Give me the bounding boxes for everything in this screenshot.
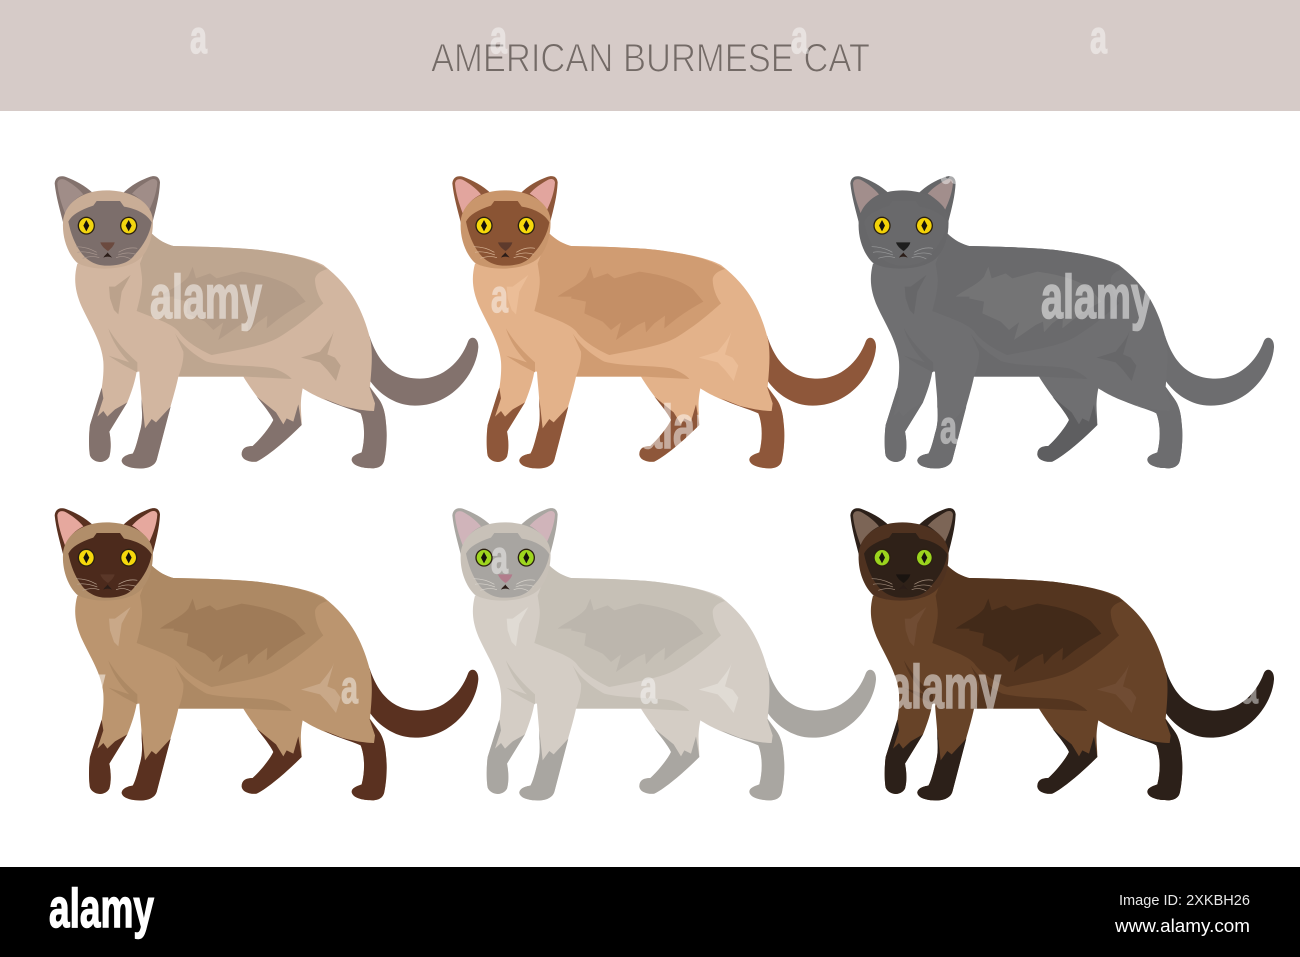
head (63, 190, 153, 269)
leg points (89, 719, 387, 800)
large alamy watermarks: alamy (640, 393, 752, 461)
leg points (885, 719, 1182, 800)
cat: champagne with chestnut points (452, 176, 876, 468)
small alamy letter watermarks: a (490, 11, 507, 63)
tail (368, 668, 478, 738)
cat: sable brown with near-black points (850, 508, 1274, 800)
body (871, 565, 1182, 800)
bottom credit bar (0, 867, 1300, 957)
small alamy letter watermarks: a (940, 401, 957, 453)
leg points (885, 387, 1182, 468)
image id: Image ID: 2XKBH26 (1119, 892, 1250, 909)
face (864, 201, 947, 266)
cat: platinum beige with taupe points (55, 176, 478, 468)
large alamy watermarks (0, 263, 1153, 721)
cat: pale lilac with grey points (452, 508, 876, 800)
cat: tan with dark brown points (55, 508, 478, 800)
tail (368, 336, 478, 406)
ears (452, 176, 558, 223)
body (75, 233, 387, 468)
website: www.alamy.com (1114, 916, 1250, 936)
leg points (89, 387, 387, 468)
ears (55, 508, 160, 555)
ears (850, 508, 956, 555)
small alamy letter watermarks: a (491, 270, 508, 322)
leg points (487, 387, 784, 468)
tail (766, 668, 876, 738)
ears (850, 176, 956, 223)
ears (452, 508, 558, 555)
large alamy watermarks: alamy (889, 653, 1001, 721)
large alamy watermarks: alamy (1041, 263, 1153, 331)
small alamy letter watermarks: a (791, 11, 808, 63)
body (473, 565, 784, 800)
small alamy letter watermarks: a (1241, 661, 1258, 713)
head (461, 522, 551, 601)
large alamy watermarks: alamy (150, 263, 262, 331)
face (466, 201, 549, 266)
tail (1164, 336, 1274, 406)
leg points (487, 719, 784, 800)
body (871, 233, 1182, 468)
body (473, 233, 784, 468)
small alamy letter watermarks (190, 11, 1258, 713)
header band (0, 0, 1300, 111)
small alamy letter watermarks: a (940, 141, 957, 193)
small alamy letter watermarks: a (640, 661, 657, 713)
face (864, 533, 947, 598)
head (63, 522, 153, 601)
face (466, 533, 549, 598)
small alamy letter watermarks: a (491, 531, 508, 583)
body (75, 565, 387, 800)
cat: blue grey (850, 176, 1274, 468)
face (68, 201, 152, 266)
head (461, 190, 551, 269)
tail (766, 336, 876, 406)
small alamy letter watermarks: a (190, 11, 207, 63)
face (68, 533, 152, 598)
small alamy letter watermarks: a (1090, 11, 1107, 63)
alamy logo: alamy (49, 877, 154, 939)
title: AMERICAN BURMESE CAT (431, 36, 870, 80)
ears (55, 176, 160, 223)
small alamy letter watermarks: a (341, 661, 358, 713)
head (859, 190, 949, 269)
head (859, 522, 949, 601)
tail (1164, 668, 1274, 738)
